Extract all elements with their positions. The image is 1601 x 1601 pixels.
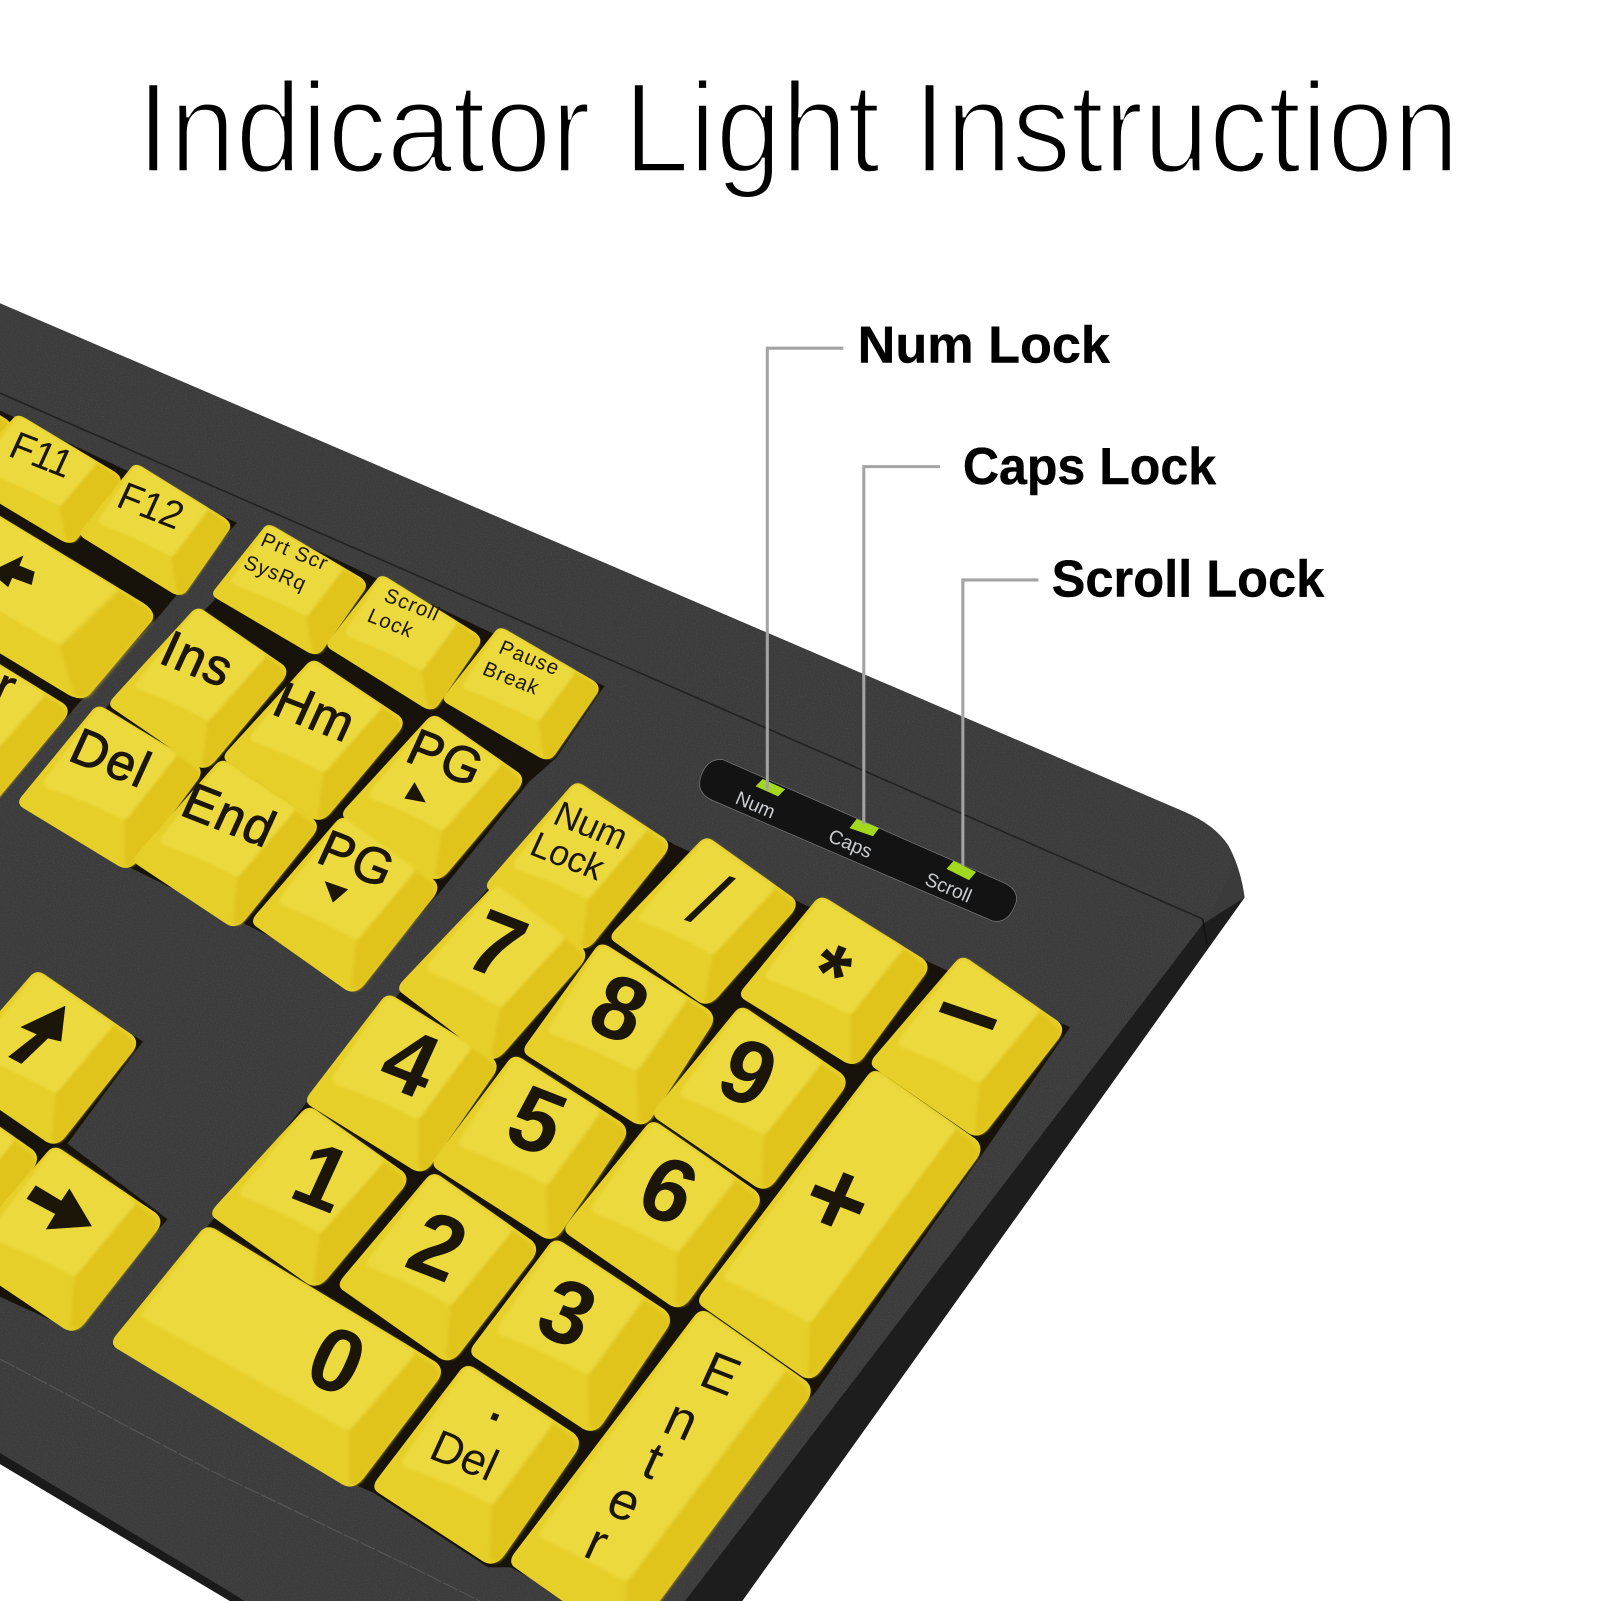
- key: minus: [867, 951, 1073, 1140]
- key: Enter: n: [656, 1388, 708, 1453]
- callout: Scroll Lock: [963, 550, 1324, 866]
- callout: Num Lock: [767, 316, 1110, 790]
- key: 6: [561, 1119, 771, 1312]
- key: Pause Break: Pause: [495, 637, 564, 680]
- indicator plate: [700, 759, 1016, 921]
- key: 5: 5: [492, 1066, 580, 1176]
- key: decimal Del: [369, 1363, 591, 1569]
- key: 1: 1: [278, 1123, 366, 1233]
- LED: Num: [756, 779, 785, 796]
- arrow keys: [0, 969, 172, 1335]
- keyboard photo: [0, 303, 1245, 1601]
- key wells: [0, 410, 1070, 1601]
- key: 1: [207, 1105, 418, 1290]
- key: asterisk: *: [794, 924, 866, 1025]
- plate label: Scroll: Scroll: [922, 868, 975, 908]
- key: F10 stub: [0, 365, 20, 496]
- key: Scroll Lock: [324, 574, 489, 713]
- key: 2: [335, 1171, 547, 1365]
- key: Num Lock: Lock: [524, 824, 611, 888]
- key: Ins: [106, 606, 296, 772]
- leader line: Caps Lock: [864, 467, 940, 824]
- key: Enter: r: [576, 1512, 617, 1573]
- key: Enter: E: [692, 1341, 749, 1408]
- key: Hm: [220, 658, 413, 824]
- navigation keys: [15, 523, 608, 996]
- key: Enter: [506, 1307, 821, 1601]
- key: 2: 2: [393, 1192, 481, 1302]
- key: slash: [607, 835, 806, 1008]
- key: Enter: t: [634, 1431, 672, 1491]
- key: Prt Scr SysRq: Prt Scr: [257, 530, 332, 575]
- key: F12: [77, 462, 239, 598]
- key: PG down: [249, 815, 448, 996]
- key: plus: +: [784, 1132, 892, 1265]
- key: 9: 9: [704, 1018, 792, 1128]
- key: 0: [108, 1224, 452, 1491]
- callout: Caps Lock: [864, 438, 1216, 824]
- key: 6: 6: [624, 1136, 712, 1246]
- key: Del: [15, 704, 211, 872]
- key: End: [130, 758, 327, 930]
- key: Prt Scr SysRq: SysRq: [240, 552, 310, 596]
- plate label: Caps: Caps: [825, 825, 875, 863]
- key: decimal Del: .: [483, 1378, 517, 1432]
- key: Hm: Hm: [265, 671, 365, 753]
- key: minus: −: [913, 951, 1024, 1078]
- keyboard body: [0, 303, 1245, 1601]
- key: plus: [694, 1068, 991, 1383]
- key: End: End: [174, 772, 285, 859]
- key: enter stub: [0, 645, 78, 811]
- key: 0: 0: [292, 1306, 380, 1416]
- key: 7: 7: [453, 891, 541, 1001]
- key: Num Lock: Num: [548, 793, 634, 857]
- key: 7: [395, 882, 596, 1063]
- key: up arrow: [0, 969, 147, 1148]
- key: Pause Break: Break: [479, 658, 543, 700]
- key: PG down: PG: [310, 819, 405, 899]
- key: 3: 3: [523, 1258, 611, 1368]
- key: down arrow stub: [0, 1083, 48, 1274]
- key: F12: F12: [111, 475, 190, 538]
- key: slash: /: [676, 858, 743, 942]
- plate background: [700, 759, 1016, 921]
- leader line: Num Lock: [767, 348, 843, 790]
- key: PG up: PG: [399, 718, 493, 798]
- title: Indicator Light Instruction: [137, 57, 1459, 200]
- numeric keypad: [108, 780, 1073, 1601]
- LED: Caps: [850, 819, 879, 836]
- key: 4: 4: [366, 1008, 454, 1118]
- label: Num Lock: Num Lock: [858, 316, 1110, 374]
- key: 5: [429, 1054, 637, 1243]
- key: Scroll Lock: Lock: [364, 605, 417, 643]
- keyboard side edge: [674, 897, 1245, 1601]
- key: 3: [467, 1237, 682, 1436]
- key: 4: [303, 992, 508, 1176]
- key: 8: [520, 941, 724, 1129]
- key: Pause Break: [440, 626, 608, 763]
- plate label: Num: Num: [732, 787, 778, 823]
- leader line: Scroll Lock: [963, 580, 1038, 866]
- key: asterisk: [737, 895, 938, 1068]
- label: Scroll Lock: Scroll Lock: [1052, 550, 1324, 608]
- key: PG up: [339, 713, 532, 883]
- key: Prt Scr SysRq: [210, 523, 375, 658]
- key: decimal Del: Del: [423, 1420, 506, 1491]
- function and backspace keys: [0, 365, 239, 811]
- key: right arrow: [0, 1144, 172, 1335]
- key: Ins: Ins: [153, 620, 243, 698]
- key: F11: F11: [3, 424, 80, 487]
- key: 9: [650, 1005, 857, 1193]
- key: Del: Del: [62, 717, 160, 799]
- key: backspace: [0, 415, 165, 703]
- key: Num Lock: [482, 780, 678, 953]
- key: Enter: e: [598, 1469, 650, 1534]
- LED: Scroll: [947, 861, 976, 880]
- key: Scroll Lock: Scroll: [381, 585, 444, 626]
- key: 8: 8: [575, 954, 663, 1064]
- key: F11: [0, 413, 130, 546]
- label: Caps Lock: Caps Lock: [963, 438, 1216, 496]
